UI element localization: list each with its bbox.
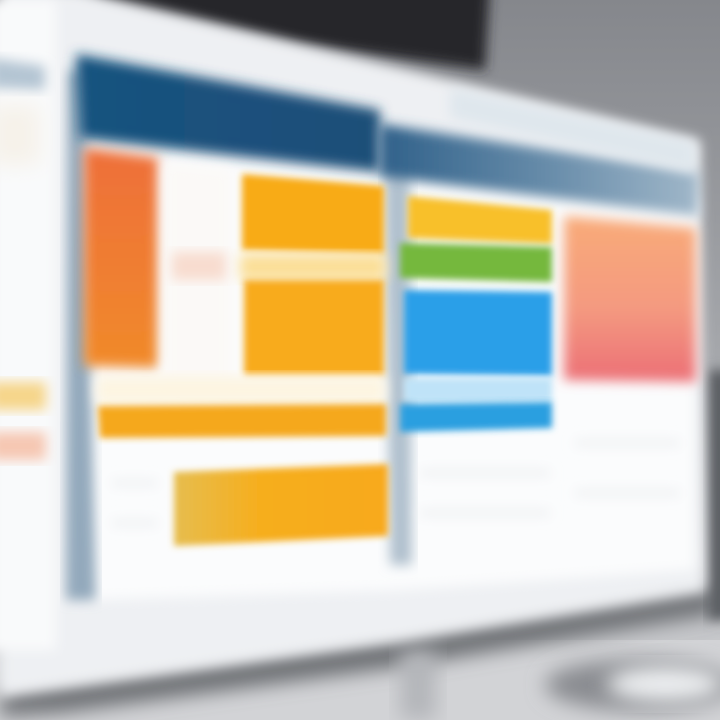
vertical divider centre — [384, 130, 412, 565]
pale band under chart — [96, 376, 386, 404]
header bar: right section — [380, 124, 698, 216]
monitor stand and desk objects — [400, 370, 720, 720]
vertical divider left — [66, 70, 96, 600]
yellow bar — [408, 196, 552, 244]
monitor bottom shadow — [0, 590, 720, 716]
white column — [164, 162, 232, 388]
orange column — [84, 148, 158, 368]
amber blocks — [240, 174, 386, 376]
top light band — [450, 88, 695, 172]
lower amber block — [174, 464, 388, 546]
panel: left sidebar — [0, 0, 56, 650]
peach gradient block — [564, 216, 696, 382]
header bar: left section — [76, 54, 380, 172]
amber wide bar — [98, 404, 386, 438]
white screen body — [75, 150, 695, 600]
faint table lines — [112, 440, 680, 526]
green bar — [400, 243, 552, 282]
blue block — [404, 290, 552, 376]
pale blue band — [404, 378, 552, 402]
dark rear monitor — [95, 0, 490, 70]
blue bar — [400, 402, 552, 432]
